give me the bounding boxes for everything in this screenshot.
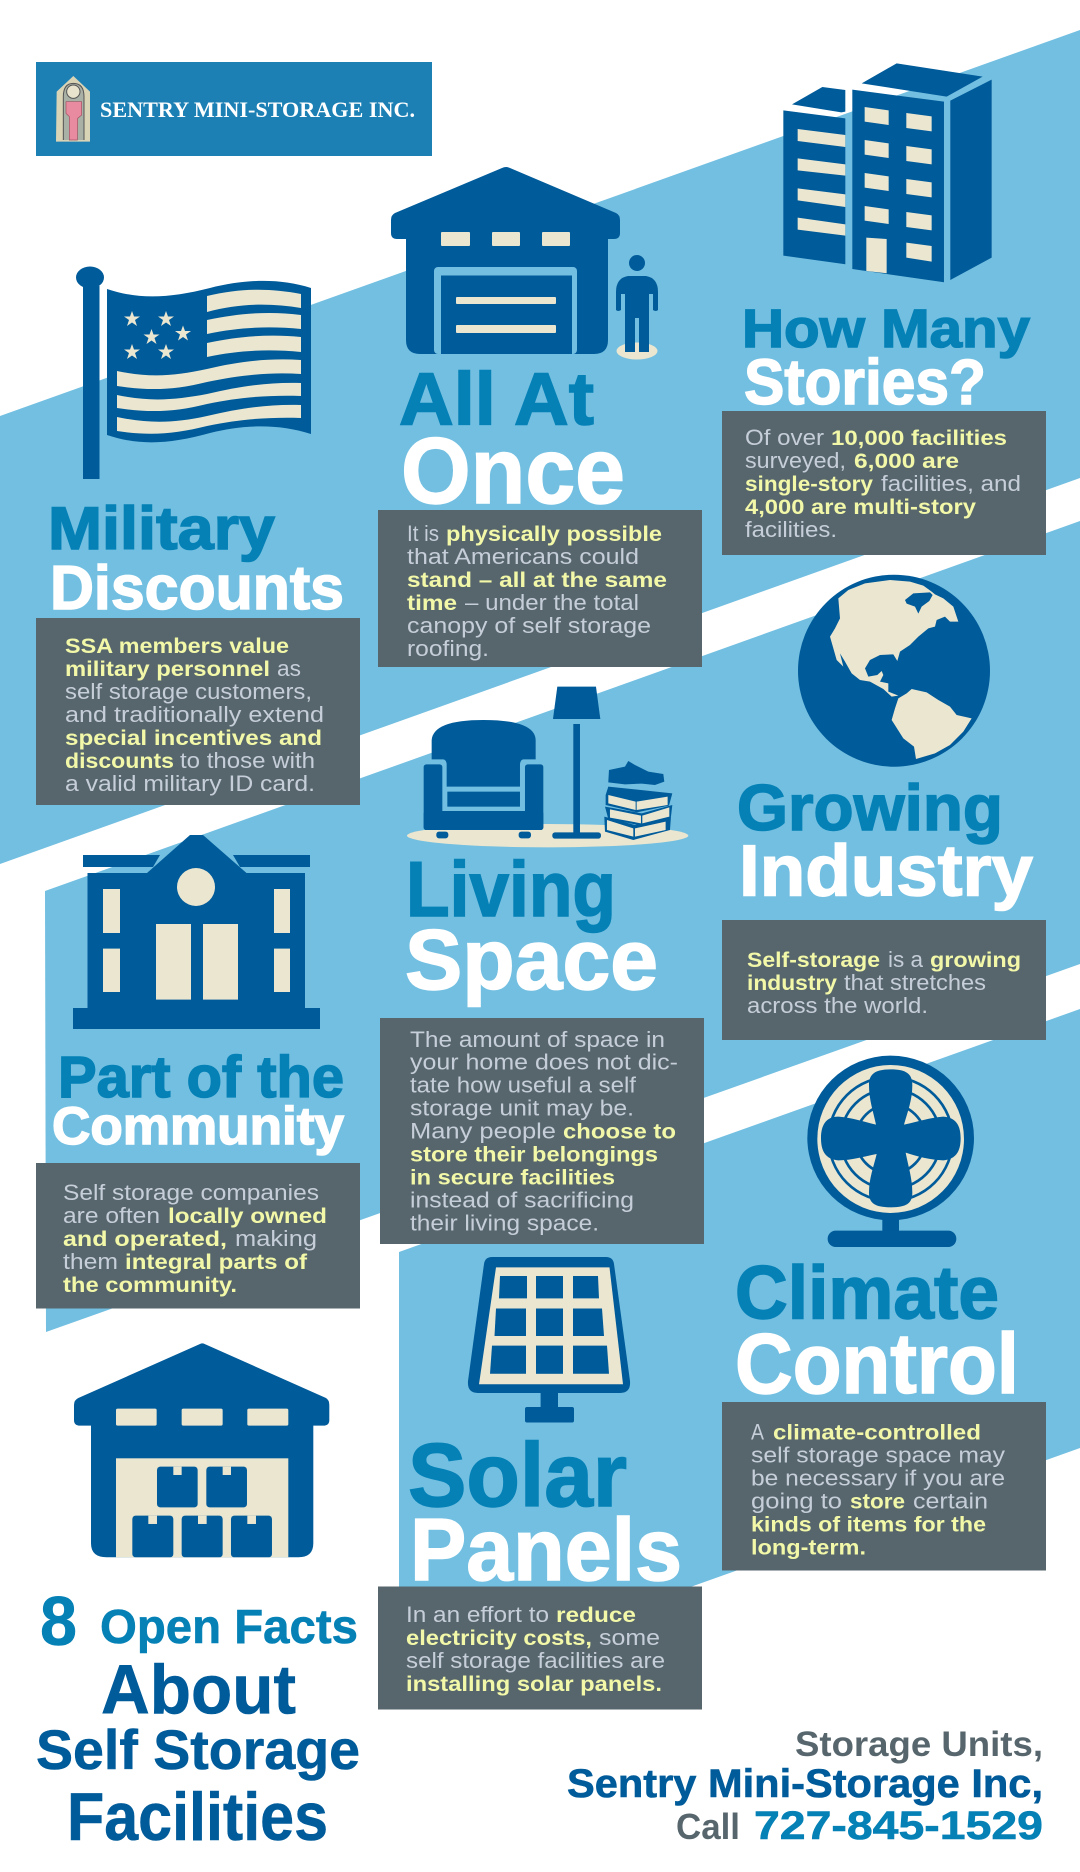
- title: 8 Open Facts About Self Storage Facilities: [36, 1582, 360, 1855]
- heading: Climate Control: Control: [735, 1317, 1019, 1412]
- background diagonal band: middle: [45, 521, 1080, 1332]
- text panel: part of the community: are often: [63, 1203, 160, 1228]
- text panel: solar panels: self storage facilities are: [406, 1648, 665, 1673]
- text panel: climate control: going to: [751, 1488, 842, 1514]
- heading: Living Space: Space: [405, 913, 658, 1008]
- text panel: all at once: [378, 510, 702, 667]
- text panel: climate control: [722, 1402, 1046, 1570]
- call to action: contact details: Call: [676, 1806, 740, 1847]
- text panel: how many stories: [722, 411, 1046, 555]
- section: How Many Stories?: [722, 63, 1046, 555]
- background diagonal band: top: [0, 30, 1080, 864]
- text panel: living space: [380, 1018, 704, 1244]
- text panel: all at once: time: [407, 591, 457, 615]
- text panel: part of the community: [36, 1163, 360, 1308]
- icon: solar panel: [468, 1257, 630, 1422]
- text panel: how many stories: single-story: [745, 472, 873, 496]
- icon: electric fan: [807, 1056, 974, 1247]
- text panel: solar panels: installing solar panels.: [406, 1672, 662, 1696]
- text panel: living space: in secure facilities: [410, 1166, 615, 1190]
- section: Growing Industry: [722, 575, 1046, 1040]
- icon: apartment buildings: [783, 63, 992, 282]
- text panel: living space: Many people: [410, 1118, 556, 1144]
- heading: All At Once: All At: [399, 358, 594, 440]
- heading: All At Once: Once: [401, 418, 625, 523]
- text panel: how many stories: 10,000 facilities: [831, 426, 1007, 450]
- text panel: all at once: roofing.: [407, 636, 489, 661]
- heading: How Many Stories?: [742, 299, 1030, 418]
- text panel: part of the community: Self storage companies: [63, 1180, 319, 1205]
- text panel: all at once: canopy of self storage: [407, 613, 651, 638]
- title: 8 Open Facts About Self Storage Facilities: Open Facts: [100, 1601, 358, 1654]
- section: Military Discounts: [36, 266, 360, 805]
- heading: Growing Industry: [737, 771, 1033, 912]
- heading: How Many Stories?: How Many: [742, 299, 1030, 359]
- text panel: growing industry: industry: [747, 971, 837, 995]
- text panel: military discounts: a valid military ID card.: [65, 771, 315, 796]
- text panel: part of the community: and operated,: [63, 1227, 227, 1251]
- text panel: living space: store their belongings: [410, 1142, 658, 1166]
- text panel: climate control: self storage space may: [751, 1442, 1005, 1468]
- text panel: all at once: stand – all at the same: [407, 568, 667, 592]
- text panel: climate control: kinds of items for the: [751, 1512, 986, 1536]
- heading: Climate Control: [735, 1250, 1019, 1412]
- heading: Part of the Community: [52, 1045, 345, 1156]
- logo: Sentry Mini-Storage Inc.: SENTRY MINI-STORAGE INC.: [100, 97, 415, 122]
- text panel: solar panels: In an effort to: [406, 1602, 549, 1627]
- text panel: solar panels: electricity costs,: [406, 1626, 592, 1650]
- heading: Solar Panels: Solar: [408, 1426, 627, 1526]
- heading: Military Discounts: [48, 495, 344, 623]
- text panel: part of the community: integral parts of: [125, 1250, 308, 1274]
- text panel: part of the community: locally owned: [168, 1204, 327, 1228]
- text panel: all at once: physically possible: [446, 522, 662, 546]
- heading: Military Discounts: Military: [48, 495, 276, 562]
- text panel: climate control: store: [850, 1490, 905, 1514]
- text panel: military discounts: [36, 618, 360, 805]
- section: Living Space: [380, 687, 704, 1244]
- text panel: living space: your home does not dic-: [410, 1050, 678, 1074]
- heading: Military Discounts: Discounts: [50, 554, 344, 623]
- icon: chapel emblem with figure: [56, 76, 90, 142]
- text panel: all at once: – under the total: [465, 590, 639, 615]
- text panel: part of the community: them: [63, 1249, 118, 1274]
- icon: globe: [798, 575, 990, 767]
- text panel: part of the community: the community.: [63, 1273, 237, 1297]
- text panel: solar panels: [378, 1586, 702, 1710]
- heading: Part of the Community: Community: [52, 1097, 345, 1156]
- heading: How Many Stories?: Stories?: [744, 346, 986, 418]
- text panel: military discounts: to those with: [180, 748, 315, 773]
- text panel: climate control: climate-controlled: [773, 1420, 981, 1444]
- heading: Climate Control: Climate: [735, 1250, 999, 1334]
- heading: Part of the Community: Part of the: [58, 1045, 344, 1110]
- heading: Solar Panels: Panels: [410, 1500, 682, 1599]
- text panel: climate control: be necessary if you are: [751, 1466, 1005, 1490]
- text panel: living space: their living space.: [410, 1210, 599, 1236]
- title: 8 Open Facts About Self Storage Facilities: Self Storage: [36, 1718, 360, 1781]
- call to action: contact details: Storage Units,: [795, 1725, 1043, 1764]
- background diagonal band: bottom: [399, 1009, 1080, 1691]
- icon: warehouse with person: [391, 167, 658, 360]
- text panel: military discounts: discounts: [65, 749, 174, 773]
- text panel: growing industry: is a: [888, 947, 924, 972]
- call to action: contact details: Sentry Mini-Storage Inc,: [567, 1762, 1043, 1806]
- title: 8 Open Facts About Self Storage Facilities: About: [101, 1650, 296, 1728]
- text panel: growing industry: [722, 920, 1046, 1040]
- heading: Growing Industry: Growing: [737, 771, 1003, 844]
- icon: armchair, lamp, shoe and books: [407, 687, 688, 847]
- text panel: military discounts: self storage customers,: [65, 679, 312, 704]
- title: 8 Open Facts About Self Storage Facilities: Facilities: [67, 1779, 328, 1855]
- text panel: military discounts: as: [277, 656, 301, 681]
- text panel: all at once: It is: [407, 521, 439, 546]
- icon: warehouse with boxes: [74, 1343, 329, 1557]
- text panel: military discounts: special incentives and: [65, 726, 322, 750]
- text panel: military discounts: and traditionally extend: [65, 702, 324, 727]
- heading: Solar Panels: [408, 1426, 682, 1599]
- text panel: how many stories: 4,000 are multi-story: [745, 495, 976, 519]
- text panel: part of the community: making: [235, 1226, 317, 1251]
- logo: Sentry Mini-Storage Inc.: [36, 62, 432, 156]
- heading: All At Once: [399, 358, 625, 523]
- icon: town hall building: [73, 835, 320, 1029]
- text panel: solar panels: reduce: [556, 1603, 636, 1627]
- icon: American flag: [76, 266, 311, 479]
- text panel: living space: tate how useful a self: [410, 1072, 637, 1098]
- text panel: climate control: long-term.: [751, 1536, 866, 1560]
- text panel: growing industry: Self-storage: [747, 948, 880, 972]
- text panel: living space: The amount of space in: [410, 1027, 665, 1052]
- text panel: living space: choose to: [563, 1120, 676, 1144]
- text panel: how many stories: 6,000 are: [854, 449, 959, 473]
- text panel: growing industry: that stretches: [844, 970, 986, 995]
- section: Climate Control: [722, 1056, 1046, 1570]
- text panel: climate control: A: [751, 1420, 764, 1444]
- section: Solar Panels: [378, 1257, 702, 1710]
- heading: Living Space: [405, 845, 658, 1008]
- heading: Growing Industry: Industry: [739, 832, 1033, 912]
- text panel: military discounts: SSA members value: [65, 634, 289, 658]
- text panel: how many stories: facilities.: [745, 517, 837, 542]
- text panel: all at once: that Americans could: [407, 544, 639, 569]
- text panel: growing industry: across the world.: [747, 993, 928, 1018]
- text panel: growing industry: growing: [930, 948, 1021, 972]
- text panel: living space: instead of sacrificing: [410, 1188, 634, 1212]
- text panel: living space: storage unit may be.: [410, 1096, 634, 1120]
- text panel: how many stories: Of over: [745, 425, 824, 450]
- text panel: military discounts: military personnel: [65, 657, 270, 681]
- text panel: how many stories: facilities, and: [881, 471, 1021, 496]
- title: 8 Open Facts About Self Storage Facilities: 8: [40, 1582, 77, 1660]
- text panel: climate control: certain: [913, 1488, 988, 1514]
- call to action: contact details: [567, 1725, 1043, 1848]
- heading: Living Space: Living: [406, 845, 616, 933]
- text panel: solar panels: some: [599, 1625, 660, 1650]
- text panel: how many stories: surveyed,: [745, 448, 846, 473]
- section: All At Once: [378, 167, 702, 667]
- call to action: contact details: 727-845-1529: [754, 1804, 1043, 1848]
- section: Part of the Community: [36, 835, 360, 1308]
